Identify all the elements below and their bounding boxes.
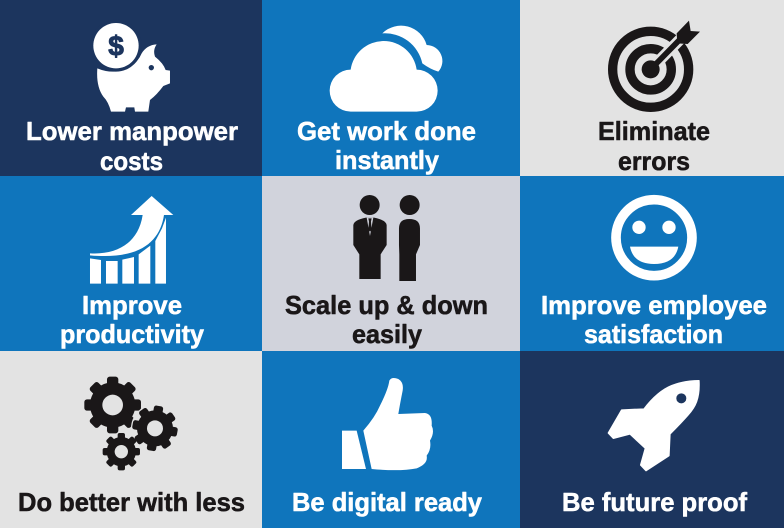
panel: get work done instantly <box>262 0 520 176</box>
icon: cloud <box>330 26 442 112</box>
text: do better with less: Do better with less <box>18 487 245 517</box>
panel: be future proof <box>520 351 784 528</box>
panel: be digital ready <box>262 351 520 528</box>
icon: two people <box>353 195 420 281</box>
text: scale up and down easily: easily <box>352 319 423 349</box>
panel: lower manpower costs <box>0 0 262 176</box>
icon: piggy bank with coin <box>90 20 170 112</box>
panel: improve employee satisfaction <box>520 176 784 351</box>
icon: rising bars with arrow <box>90 196 173 284</box>
text: lower manpower costs <box>26 116 238 176</box>
text: improve productivity <box>60 290 205 349</box>
text: get work done instantly <box>297 116 476 175</box>
text: improve employee satisfaction <box>541 290 767 349</box>
text: improve productivity: productivity <box>60 319 205 349</box>
icon: piggy bank with coin: $ <box>108 30 124 61</box>
text: get work done instantly: Get work done <box>297 116 476 146</box>
text: scale up and down easily <box>285 290 488 349</box>
text: improve productivity: Improve <box>82 290 182 320</box>
panel: eliminate errors <box>520 0 784 176</box>
text: get work done instantly: instantly <box>335 145 440 175</box>
icon: thumbs up <box>342 378 433 470</box>
text: eliminate errors: errors <box>618 146 690 176</box>
text: improve employee satisfaction: Improve employee <box>541 290 767 320</box>
panel: do better with less <box>0 351 262 528</box>
icon: target with arrow <box>613 21 700 107</box>
text: lower manpower costs: Lower manpower <box>26 116 238 146</box>
text: be digital ready: Be digital ready <box>292 487 483 517</box>
icon: rocket <box>608 381 699 471</box>
text: scale up and down easily: Scale up & down <box>285 290 488 320</box>
text: eliminate errors <box>598 116 710 176</box>
text: eliminate errors: Eliminate <box>598 116 710 146</box>
text: improve employee satisfaction: satisfaction <box>584 319 723 349</box>
icon: smiling face <box>616 200 692 276</box>
panel: improve productivity <box>0 176 262 351</box>
text: lower manpower costs: costs <box>100 146 163 176</box>
icon: three gears <box>84 377 179 470</box>
panel: scale up and down easily <box>262 176 520 351</box>
text: be future proof: Be future proof <box>562 487 747 517</box>
